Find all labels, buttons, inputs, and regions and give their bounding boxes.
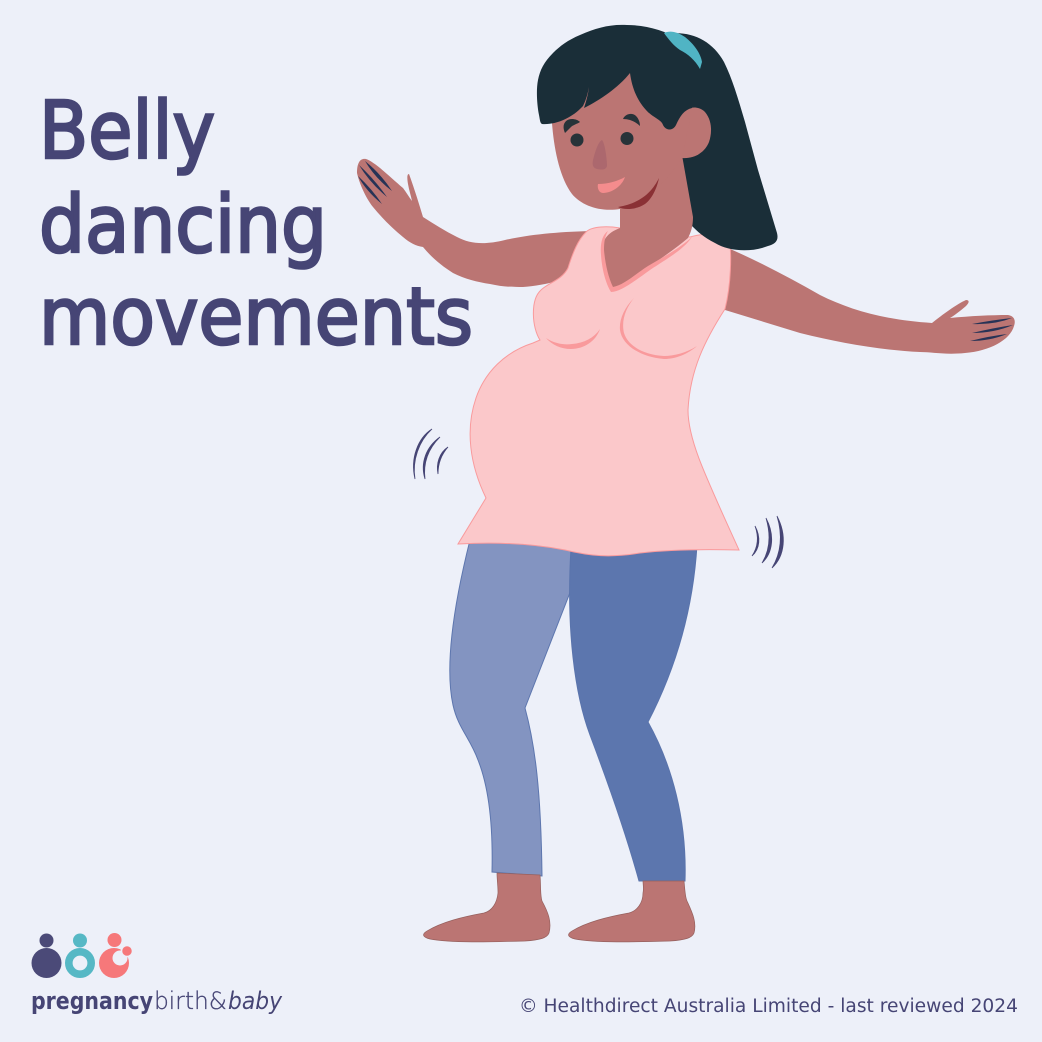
right arm and hand [725,248,1015,354]
title: movements [39,271,473,363]
motion lines right [752,516,783,568]
bust shading left [546,329,600,349]
ear [680,107,711,158]
mouth [598,177,625,193]
left fingers [358,161,392,204]
title: dancing [39,179,327,271]
woman belly dancing [357,25,1015,942]
neckline trim [601,231,692,292]
copyright: © Healthdirect Australia Limited - last reviewed 2024 [519,996,1018,1017]
logo [31,933,283,1015]
logo icon: teal figure [69,934,91,974]
logo wordmark [31,987,283,1015]
bust shading right [620,298,697,359]
nose [593,140,607,170]
logo wordmark: baby [228,987,283,1015]
left eye [570,134,584,146]
left arm and hand [357,159,590,287]
neck [602,155,693,291]
hair band [664,32,702,69]
left eyebrow [564,119,580,133]
right foot [569,881,695,942]
title [39,85,473,363]
right eyebrow [623,114,640,126]
hair front [537,25,700,129]
logo wordmark: pregnancy [31,987,153,1015]
top [458,227,739,556]
left foot [424,873,550,942]
logo icon: coral figure [99,933,132,978]
right eye [620,132,634,145]
motion lines left [414,429,448,479]
title: Belly [39,85,215,177]
logo wordmark: birth& [154,987,227,1015]
hair back / ponytail [660,33,778,250]
smile line [618,178,659,209]
right fingers [970,318,1013,341]
face [552,60,690,210]
right leg [570,545,697,881]
left leg [450,540,571,876]
logo icon: dark figure [32,934,62,978]
